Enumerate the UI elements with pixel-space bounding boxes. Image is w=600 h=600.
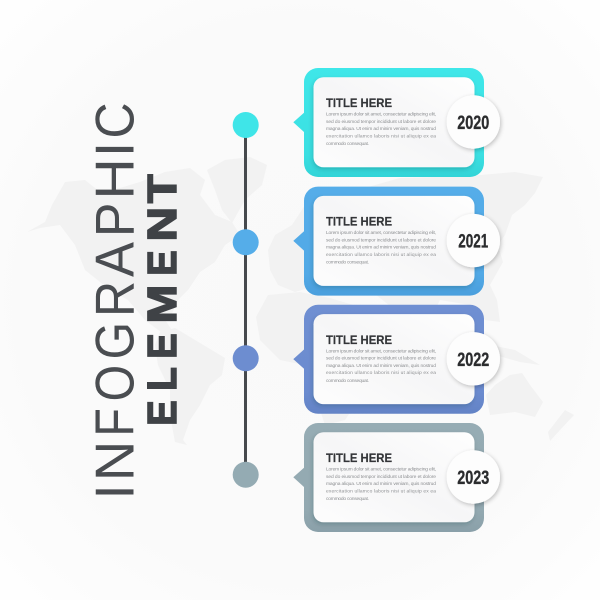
world map xyxy=(27,157,574,445)
title: INFOGRAPHIC: P xyxy=(85,203,146,237)
dot 2023 xyxy=(233,462,259,488)
body text: commodo consequat. xyxy=(326,378,369,384)
title: ELEMENT: E xyxy=(140,400,185,426)
year: 2022 xyxy=(457,349,489,371)
body text xyxy=(326,112,436,147)
card frame with pointer xyxy=(293,68,484,177)
body text: commodo consequat. xyxy=(326,141,369,147)
body text: sed do eiusmod tempor incididunt ut labore et dolore xyxy=(326,474,436,480)
title: ELEMENT: E xyxy=(140,250,185,276)
dot 2022 xyxy=(233,345,259,371)
dot 2020 xyxy=(233,112,259,138)
body text: exercitation ullamco laboris nisi ut aliquip ex ea xyxy=(326,252,436,258)
inner card xyxy=(314,432,474,522)
year: 2020 xyxy=(457,112,489,134)
heading: TITLE HERE xyxy=(326,98,392,110)
body text: magna aliqua. Ut enim ad minim veniam, quis nostrud xyxy=(326,363,436,369)
title: ELEMENT: L xyxy=(140,367,185,391)
body text: exercitation ullamco laboris nisi ut aliquip ex ea xyxy=(326,488,436,494)
body text: exercitation ullamco laboris nisi ut aliquip ex ea xyxy=(326,133,436,139)
title: INFOGRAPHIC: C xyxy=(86,102,146,138)
panel: 2022 xyxy=(293,305,500,414)
inner card xyxy=(314,196,474,286)
body text: sed do eiusmod tempor incididunt ut labore et dolore xyxy=(326,119,436,125)
year badge xyxy=(447,214,500,267)
inner card xyxy=(314,314,474,404)
body text: sed do eiusmod tempor incididunt ut labore et dolore xyxy=(326,237,436,243)
heading: TITLE HERE xyxy=(326,217,392,229)
panel: 2021 xyxy=(293,187,500,296)
year: 2021 xyxy=(458,231,488,253)
body text: Lorem ipsum dolor sit amet, consectetur adipiscing elit, xyxy=(326,466,436,472)
timeline line xyxy=(244,125,247,475)
body text: Lorem ipsum dolor sit amet, consectetur adipiscing elit, xyxy=(326,348,436,354)
body text: sed do eiusmod tempor incididunt ut labore et dolore xyxy=(326,356,436,362)
title: INFOGRAPHIC: H xyxy=(84,158,145,200)
title: ELEMENT xyxy=(139,174,185,426)
title: INFOGRAPHIC: A xyxy=(86,242,146,277)
body text xyxy=(326,348,436,384)
body text: commodo consequat. xyxy=(326,496,369,502)
year badge xyxy=(447,95,500,149)
year badge xyxy=(447,450,500,504)
year badge xyxy=(447,332,500,386)
title: INFOGRAPHIC: R xyxy=(86,281,146,317)
panel: 2023 xyxy=(293,423,500,532)
body text: magna aliqua. Ut enim ad minim veniam, quis nostrud xyxy=(326,126,436,132)
card frame with pointer xyxy=(293,305,484,414)
title: INFOGRAPHIC: G xyxy=(84,322,145,359)
body text xyxy=(326,466,436,502)
body text: exercitation ullamco laboris nisi ut aliquip ex ea xyxy=(326,370,436,376)
title: ELEMENT: M xyxy=(139,285,185,323)
dot 2021 xyxy=(233,229,259,255)
title: INFOGRAPHIC: F xyxy=(84,408,145,437)
timeline xyxy=(233,112,259,488)
title: INFOGRAPHIC: O xyxy=(84,365,145,401)
year: 2023 xyxy=(457,467,489,489)
card frame with pointer xyxy=(293,423,484,532)
title: INFOGRAPHIC xyxy=(84,102,146,500)
title: ELEMENT: E xyxy=(140,333,185,359)
title: INFOGRAPHIC: I xyxy=(84,142,146,157)
body text xyxy=(326,230,436,266)
card frame with pointer xyxy=(293,187,484,296)
inner card xyxy=(314,77,474,167)
panel: 2020 xyxy=(293,68,500,177)
heading: TITLE HERE xyxy=(326,453,392,465)
body text: magna aliqua. Ut enim ad minim veniam, quis nostrud xyxy=(326,481,436,487)
heading: TITLE HERE xyxy=(326,335,392,347)
title: INFOGRAPHIC: N xyxy=(84,441,145,481)
body text: magna aliqua. Ut enim ad minim veniam, quis nostrud xyxy=(326,245,436,251)
body text: Lorem ipsum dolor sit amet, consectetur adipiscing elit, xyxy=(326,230,436,236)
title: ELEMENT: N xyxy=(140,207,185,242)
body text: Lorem ipsum dolor sit amet, consectetur adipiscing elit, xyxy=(326,112,436,118)
title: INFOGRAPHIC: I xyxy=(84,484,146,500)
body text: commodo consequat. xyxy=(326,260,369,266)
title: ELEMENT: T xyxy=(140,174,185,203)
